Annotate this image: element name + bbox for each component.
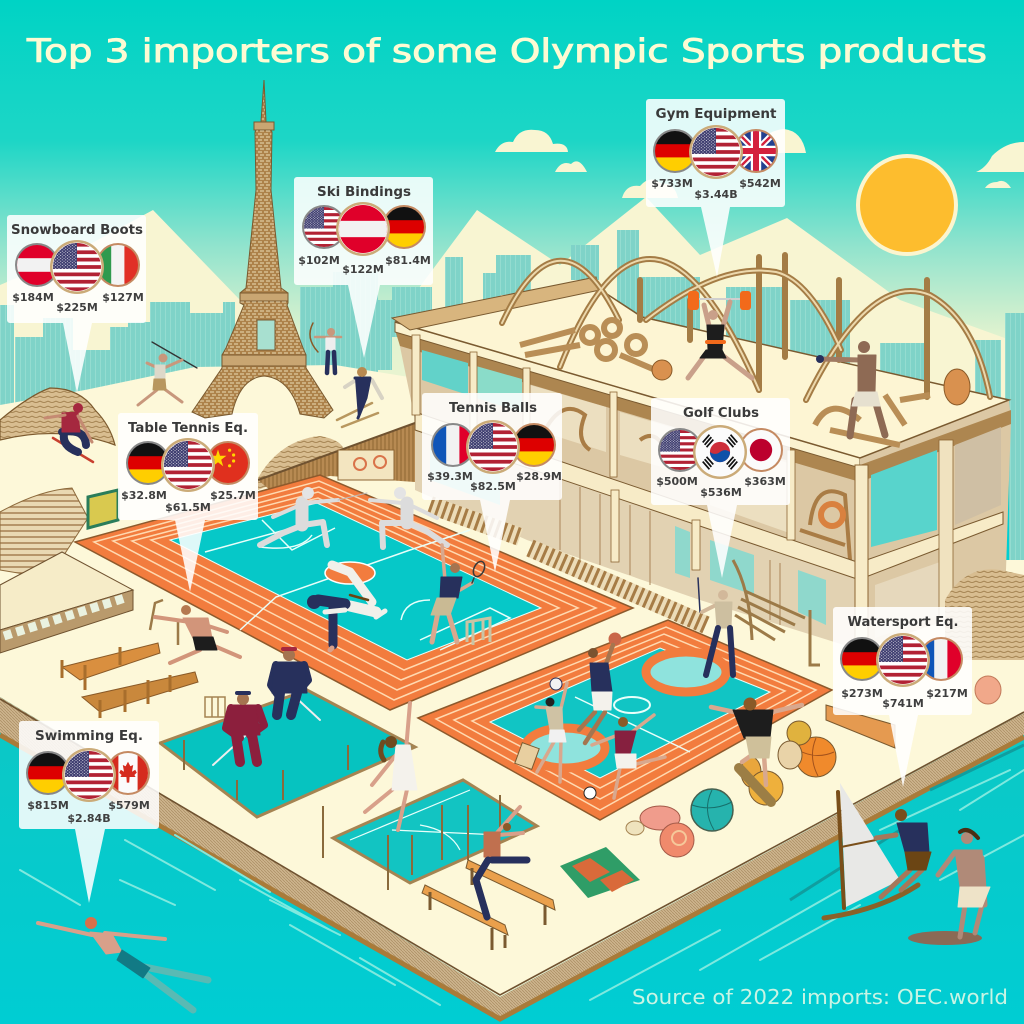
- title: Top 3 importers of some Olympic Sports products: [26, 32, 987, 70]
- javelin thrower: [138, 342, 197, 405]
- flag: Germany: [382, 205, 426, 249]
- value: United Kingdom: $542M: [739, 177, 781, 190]
- right rock pile: [945, 569, 1024, 660]
- value: Germany: $733M: [651, 177, 693, 190]
- track and court 1: [75, 475, 633, 710]
- roof edge: [395, 322, 860, 468]
- flag: Canada: [106, 751, 150, 795]
- lower floor wall panels: [560, 480, 780, 625]
- arch highlights: [502, 259, 990, 400]
- icon: sun: [858, 156, 956, 254]
- arches: [502, 255, 990, 400]
- right fencer: [370, 487, 447, 547]
- left fencer: [260, 487, 367, 545]
- flag: United States: [50, 240, 104, 294]
- weightlifter: [688, 291, 752, 378]
- right slab: [858, 512, 1003, 580]
- lower floor windows: [430, 440, 826, 625]
- building: [392, 255, 1011, 665]
- callout heading: Watersport Eq.: [848, 615, 958, 630]
- balls and sports equipment: [150, 600, 1001, 898]
- archer: [310, 323, 341, 373]
- value: United States: $102M: [298, 254, 340, 267]
- callout: Golf Clubs: [651, 398, 790, 578]
- value: United States: $500M: [656, 475, 698, 488]
- flag: France: [919, 637, 963, 681]
- striped log cabin: [0, 488, 88, 575]
- flag: Austria: [15, 243, 59, 287]
- right top band: [860, 410, 1011, 482]
- flag: United States: [62, 748, 116, 802]
- back beam: [392, 277, 600, 330]
- yellow and green banner: [88, 490, 118, 528]
- sea: [0, 699, 1024, 1024]
- boxer: [816, 341, 885, 436]
- flag: Germany: [26, 751, 70, 795]
- snowboarder: [45, 403, 93, 462]
- flag: United States: [161, 438, 215, 492]
- flag: United States: [302, 205, 346, 249]
- flag: Austria: [336, 202, 390, 256]
- value: Austria: $122M: [342, 263, 384, 276]
- skateboarder: [711, 698, 802, 802]
- swimmer: [38, 917, 208, 1010]
- callout: Gym Equipment: [646, 99, 785, 277]
- roof gym equipment: [520, 320, 930, 445]
- terrace wall: [258, 423, 415, 490]
- callout: Table Tennis Eq.: [118, 413, 258, 592]
- basketball player: [579, 632, 622, 743]
- flag: United Kingdom: [734, 129, 778, 173]
- value: France: $39.3M: [427, 470, 473, 483]
- sky background: [0, 0, 1024, 470]
- dancer: [365, 703, 417, 830]
- value: Canada: $579M: [108, 799, 150, 812]
- pillars: [412, 335, 795, 570]
- left shed: [0, 552, 133, 653]
- flag: South Korea: [693, 425, 747, 479]
- roof top: [395, 283, 1009, 458]
- right lower panels: [875, 440, 953, 638]
- value: Germany: $32.8M: [121, 489, 167, 502]
- flag: United States: [658, 428, 702, 472]
- hockey rink: [160, 690, 415, 817]
- soccer player: [584, 715, 665, 799]
- flag: Italy: [96, 243, 140, 287]
- equipment rubble row: [430, 505, 706, 625]
- value: Austria: $184M: [12, 291, 54, 304]
- upper floor gym equipment: [540, 409, 850, 560]
- value: United States: $225M: [56, 301, 98, 314]
- wooden benches: [62, 643, 555, 950]
- value: Japan: $363M: [744, 475, 786, 488]
- value: United States: $61.5M: [165, 501, 211, 514]
- city skyline: [0, 230, 1024, 570]
- flag: France: [431, 423, 475, 467]
- flag: United States: [876, 633, 930, 687]
- upper floor rooms: [530, 385, 795, 535]
- value: Germany: $81.4M: [385, 254, 431, 267]
- small pool: [323, 780, 537, 890]
- platform side edge: [0, 697, 1024, 1017]
- stairs: [733, 560, 820, 665]
- callout heading: Snowboard Boots: [11, 223, 143, 238]
- callout heading: Table Tennis Eq.: [128, 421, 248, 436]
- lower floor facade: [415, 425, 860, 650]
- value: South Korea: $536M: [700, 486, 742, 499]
- callout heading: Gym Equipment: [656, 107, 776, 122]
- upper left rocks: [0, 388, 345, 490]
- right panel: [955, 427, 1001, 525]
- clouds: [495, 129, 1024, 198]
- callout: Ski Bindings: [294, 177, 433, 358]
- judo pair: [307, 565, 385, 650]
- facade right: [860, 400, 1011, 650]
- tennis player: [431, 545, 487, 642]
- callout: Tennis Balls: [422, 393, 562, 572]
- volleyball player: [536, 678, 567, 782]
- flag: Germany: [840, 637, 884, 681]
- value: Germany: $28.9M: [516, 470, 562, 483]
- callout heading: Swimming Eq.: [35, 729, 143, 744]
- surfer: [908, 830, 990, 945]
- icon: Eiffel Tower: [192, 80, 333, 418]
- hurdler: [155, 605, 240, 663]
- flag: United States: [466, 420, 520, 474]
- hockey player navy: [271, 649, 320, 720]
- value: France: $217M: [926, 687, 968, 700]
- source note: Source of 2022 imports: OEC.world: [632, 985, 1008, 1009]
- value: Germany: $273M: [841, 687, 883, 700]
- callout: Watersport Eq.: [833, 607, 972, 787]
- right window: [871, 450, 937, 547]
- golfer: [698, 578, 733, 675]
- corner pillar: [855, 465, 868, 650]
- flag: China: [206, 441, 250, 485]
- callout: Snowboard Boots: [7, 215, 146, 393]
- gymnast: [476, 807, 527, 917]
- callout heading: Ski Bindings: [317, 185, 411, 200]
- main platform ground: [0, 365, 1024, 997]
- value: United States: $3.44B: [694, 188, 738, 201]
- value: Italy: $127M: [102, 291, 144, 304]
- callout heading: Tennis Balls: [449, 401, 537, 416]
- upper band: [395, 330, 860, 482]
- value: United States: $2.84B: [67, 812, 111, 825]
- flag: Germany: [653, 129, 697, 173]
- flag: United States: [689, 125, 743, 179]
- value: Germany: $815M: [27, 799, 69, 812]
- mountains: [0, 197, 1024, 420]
- mid slab: [415, 412, 860, 580]
- flag: Germany: [126, 441, 170, 485]
- callout: Swimming Eq.: [19, 721, 159, 903]
- windsurfer: [824, 783, 931, 918]
- flag: Germany: [512, 423, 556, 467]
- callout heading: Golf Clubs: [683, 406, 759, 421]
- hockey player maroon: [213, 693, 264, 765]
- upper floor facade: [395, 322, 860, 572]
- flag: Japan: [739, 428, 783, 472]
- skier: [337, 367, 382, 427]
- athletes: [38, 291, 990, 1010]
- value: United States: $82.5M: [470, 480, 516, 493]
- value: United States: $741M: [882, 697, 924, 710]
- value: China: $25.7M: [210, 489, 256, 502]
- facade windows: [422, 350, 522, 412]
- track and court 2: [418, 620, 832, 820]
